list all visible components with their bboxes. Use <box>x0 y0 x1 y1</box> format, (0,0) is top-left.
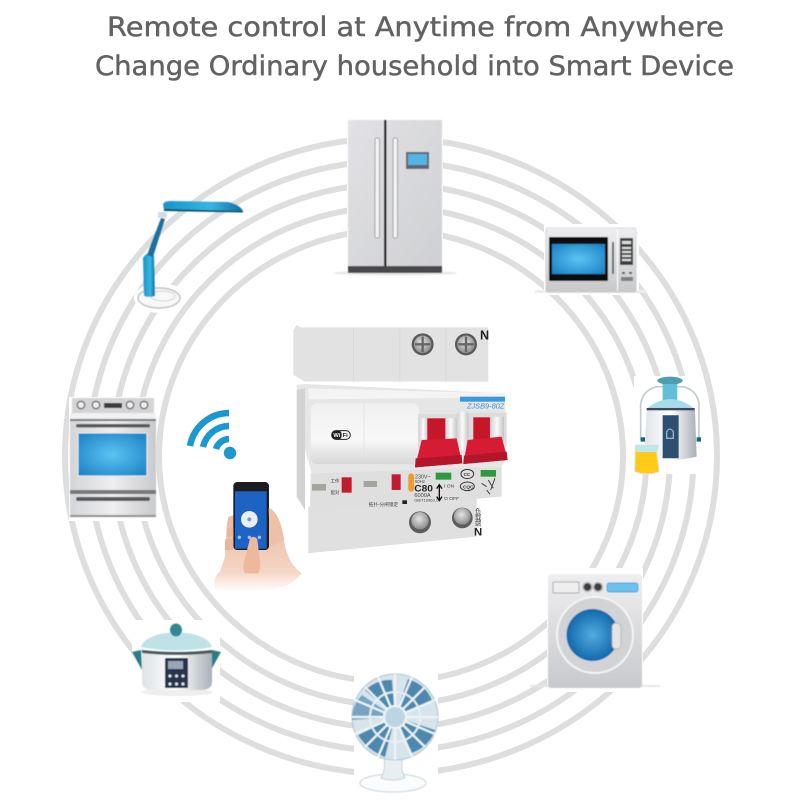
breaker label panel: 工作 <box>331 477 340 484</box>
breaker main body <box>297 384 506 510</box>
breaker module cover with wifi badge: Fi <box>343 433 348 439</box>
breaker label panel <box>310 467 502 513</box>
icon: oven <box>70 398 156 517</box>
breaker lower terminal block: 端 <box>475 518 482 527</box>
breaker main body: ZJSB9-80Z <box>466 401 505 410</box>
icon: washing machine <box>530 574 660 688</box>
breaker label panel: CC <box>464 472 471 477</box>
breaker module cover with wifi badge: Wi <box>333 433 341 439</box>
icon: juicer <box>635 377 701 474</box>
breaker label panel: O OFF <box>444 496 459 502</box>
breaker label panel: 230V~ <box>415 474 431 480</box>
breaker label panel: 50Hz <box>415 479 425 484</box>
breaker lower terminal block: 负 <box>475 506 481 515</box>
icon: electric fan <box>352 674 438 792</box>
icon: refrigerator <box>333 120 457 276</box>
title <box>95 12 734 82</box>
breaker module cover with wifi badge <box>311 403 419 464</box>
concentric signal rings <box>65 138 717 774</box>
breaker label panel: GB/T10963.1 <box>414 498 439 503</box>
icon: wifi symbol <box>190 413 236 459</box>
icon: desk lamp <box>138 201 243 308</box>
ring gaps around appliances <box>69 115 703 796</box>
breaker upper terminal block: N <box>480 329 489 343</box>
breaker label panel: I ON <box>444 483 455 489</box>
breaker label panel: 配对 <box>331 489 340 496</box>
breaker label panel: 6000A <box>414 493 431 499</box>
icon: rice cooker <box>132 624 221 696</box>
icon: hand holding smartphone <box>214 482 302 592</box>
title: Change Ordinary household into Smart Device <box>95 51 734 82</box>
icon: microwave <box>535 228 647 293</box>
breaker upper terminal block <box>293 325 489 382</box>
breaker lower terminal block: N <box>474 526 482 538</box>
breaker red toggle switches <box>415 412 508 467</box>
breaker lower terminal block <box>308 495 482 553</box>
breaker label panel: 拓扑-分闸锁定 <box>369 501 398 508</box>
breaker label panel: C80 <box>414 484 433 494</box>
title: Remote control at Anytime from Anywhere <box>107 12 724 43</box>
breaker lower terminal block: 载 <box>475 512 482 521</box>
breaker label panel: CQC <box>463 484 474 489</box>
circuit breaker <box>293 325 508 553</box>
